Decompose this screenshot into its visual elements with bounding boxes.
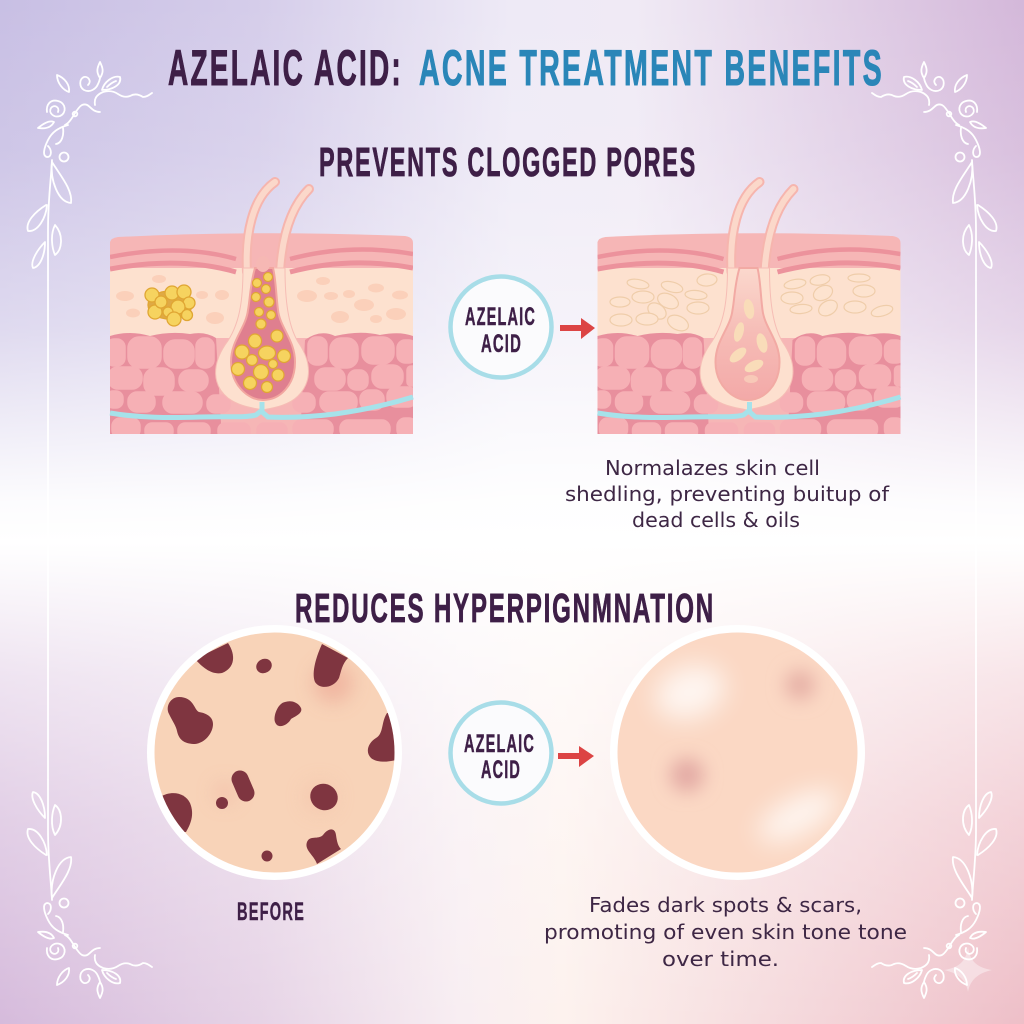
fat spots [116, 275, 408, 324]
text: hyperpigmentation description: promoting of even skin tone tone [544, 920, 907, 944]
text: hyperpigmentation description [544, 893, 907, 971]
heading: prevents clogged pores: PREVENTS CLOGGED PORES [319, 139, 697, 185]
arrow: bottom [558, 746, 594, 767]
heading: reduces hyperpigmentation: REDUCES HYPERPIGNMNATION [295, 585, 715, 631]
panel: treated skin diagram [594, 182, 904, 440]
title [168, 40, 884, 96]
text: pores description: dead cells & oils [632, 508, 800, 532]
title: AZELAIC ACID: [168, 40, 403, 96]
circle: after skin [610, 625, 865, 880]
clogged sebum [232, 272, 290, 392]
icon: sparkle [944, 947, 992, 992]
text: hyperpigmentation description: Fades dark spots & scars, [589, 893, 862, 917]
oil cluster [145, 285, 195, 326]
cleared follicle cells [727, 298, 769, 383]
panel: clogged pore skin diagram [106, 182, 417, 440]
arrow: top [560, 318, 595, 339]
badge: azelaic acid bottom: ACID [481, 756, 521, 784]
text: pores description [565, 456, 890, 532]
badge: azelaic acid bottom [450, 702, 552, 804]
circle: before skin [147, 625, 402, 880]
badge: azelaic acid bottom: AZELAIC [464, 730, 535, 758]
badge: azelaic acid top [450, 276, 552, 378]
text: hyperpigmentation description: over time. [662, 947, 779, 971]
label: before: BEFORE [237, 898, 305, 926]
badge: azelaic acid top: ACID [481, 330, 522, 358]
text: pores description: Normalazes skin cell [605, 456, 820, 480]
badge: azelaic acid top: AZELAIC [465, 303, 536, 331]
dead cell outlines [610, 273, 894, 334]
text: pores description: shedling, preventing buitup of [565, 482, 890, 506]
